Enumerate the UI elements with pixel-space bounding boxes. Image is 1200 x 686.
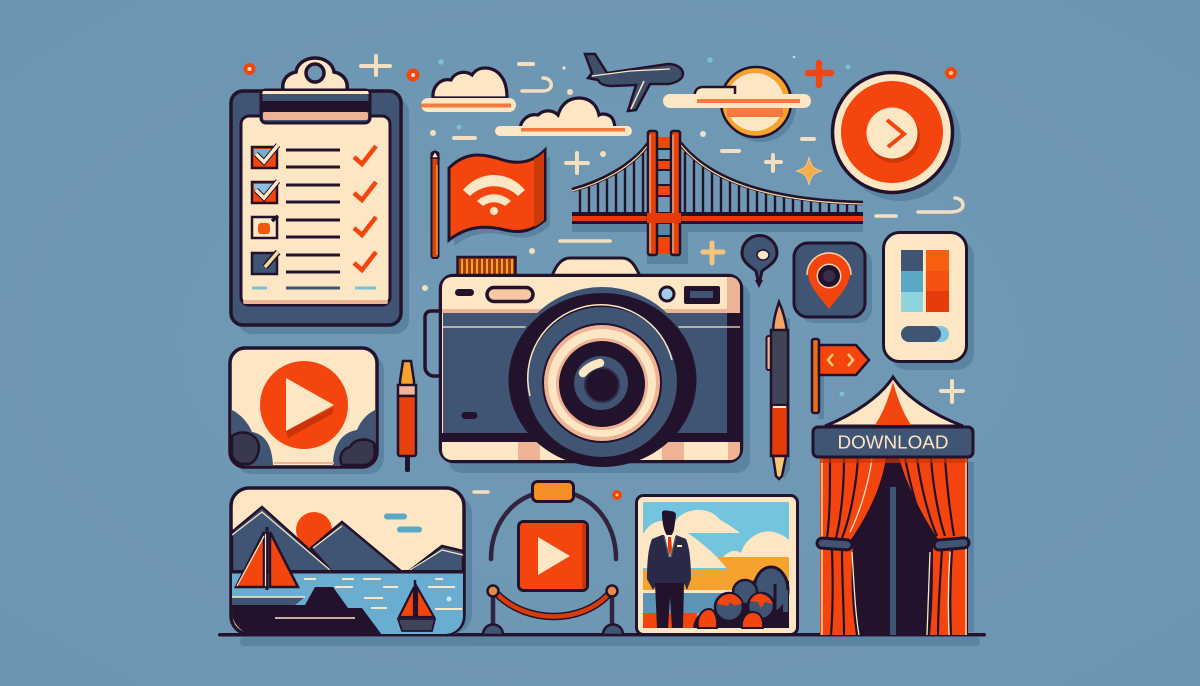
tent roof [825,377,963,426]
icon: left cloud [421,68,516,112]
large sailboat [232,527,305,605]
icon: round next button [832,72,961,201]
icon: landscape card [231,488,472,635]
bushes [693,567,789,628]
mountains [232,507,463,572]
rocks left [232,410,273,465]
icon: clipboard [231,58,409,334]
camera hump [552,258,640,276]
download banner [813,427,973,457]
icon: framed photo [636,496,798,634]
icon: middle cloud [495,98,632,136]
small sailboat [398,580,435,631]
icon: code flag [812,339,869,419]
play circle [260,361,348,449]
checklist [252,145,376,288]
camera strap loop [425,311,441,376]
icon: pencil thin [431,151,439,258]
icon: big pen [766,302,790,479]
rope arch [491,493,616,559]
tent curtains [817,457,974,635]
orange tab [532,482,574,502]
sun [296,512,332,548]
posts and rope [483,586,623,635]
icon: suspension bridge [572,131,863,264]
icon: map pin tile [794,243,872,323]
icon: video play card [230,348,384,474]
icon: location balloon [742,236,777,288]
man in suit [647,510,691,628]
icon: rope stand with play [483,482,623,635]
icon: airplane [585,54,683,111]
camera lens [508,287,696,467]
icon: download tent [813,377,974,635]
water [232,570,463,634]
ground line [218,633,986,646]
icon: wifi flag [449,150,550,246]
photo stripes [643,557,789,590]
photo clouds [643,510,740,535]
camera dial [458,257,516,276]
clouds [387,516,419,530]
download banner: DOWNLOAD [838,432,948,452]
decorations: sparks and dots [244,56,963,500]
icon: palette phone card [884,232,974,370]
icon: sun behind cloud [663,67,811,142]
rocks right [333,410,375,465]
icon: main camera [425,257,750,473]
icon: small pen [398,361,416,472]
foreground rocks [232,587,382,635]
play square [518,522,588,590]
camera body [440,276,742,462]
